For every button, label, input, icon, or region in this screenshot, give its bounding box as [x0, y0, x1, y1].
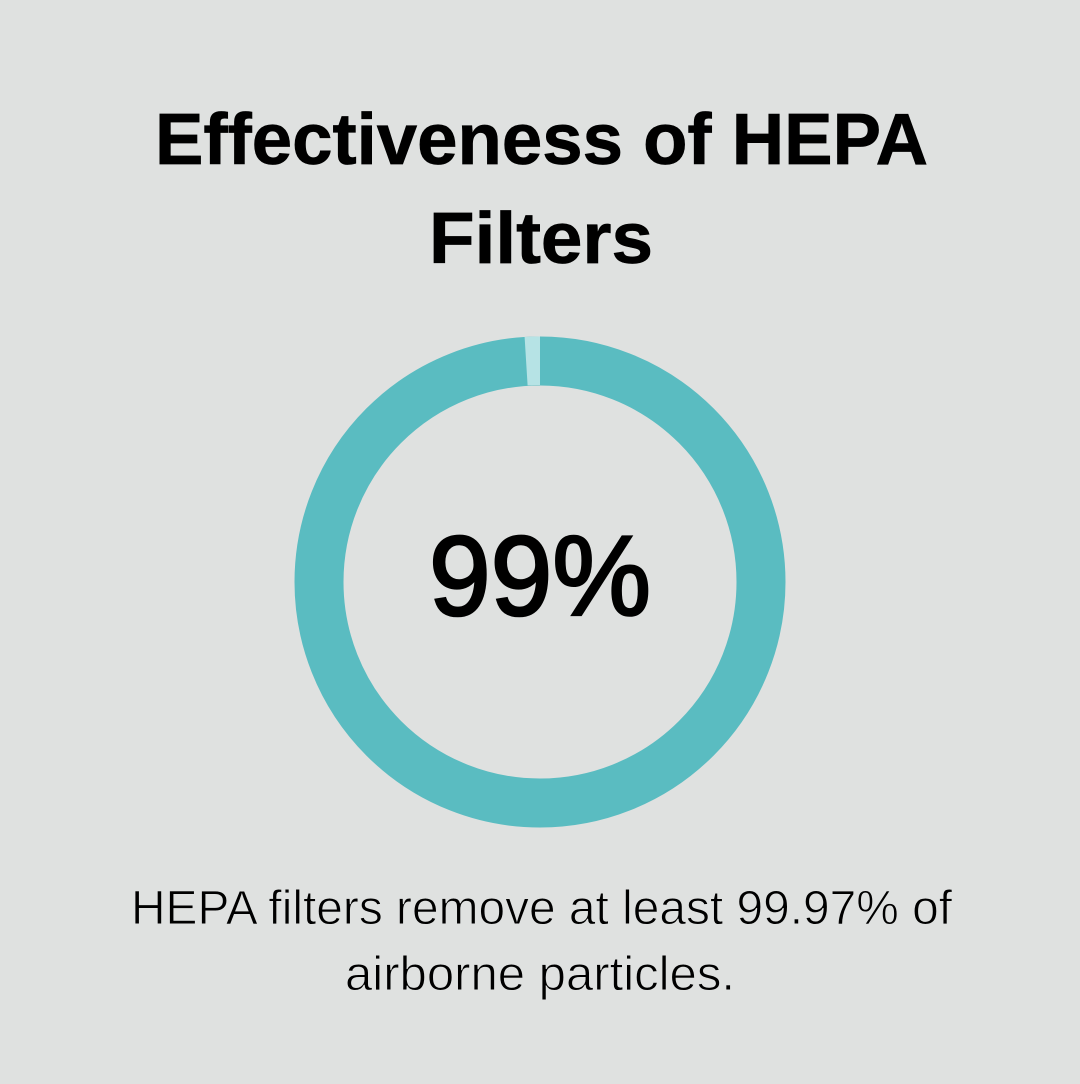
- title: Filters: [429, 199, 653, 279]
- title: Effectiveness of HEPA: [155, 100, 928, 180]
- description: airborne particles.: [345, 948, 735, 1001]
- donut value: 99%: [429, 513, 651, 639]
- description: [131, 882, 953, 1001]
- description: HEPA filters remove at least 99.97% of: [131, 882, 953, 935]
- title: [155, 100, 928, 279]
- donut chart: 99%: [319, 336, 761, 803]
